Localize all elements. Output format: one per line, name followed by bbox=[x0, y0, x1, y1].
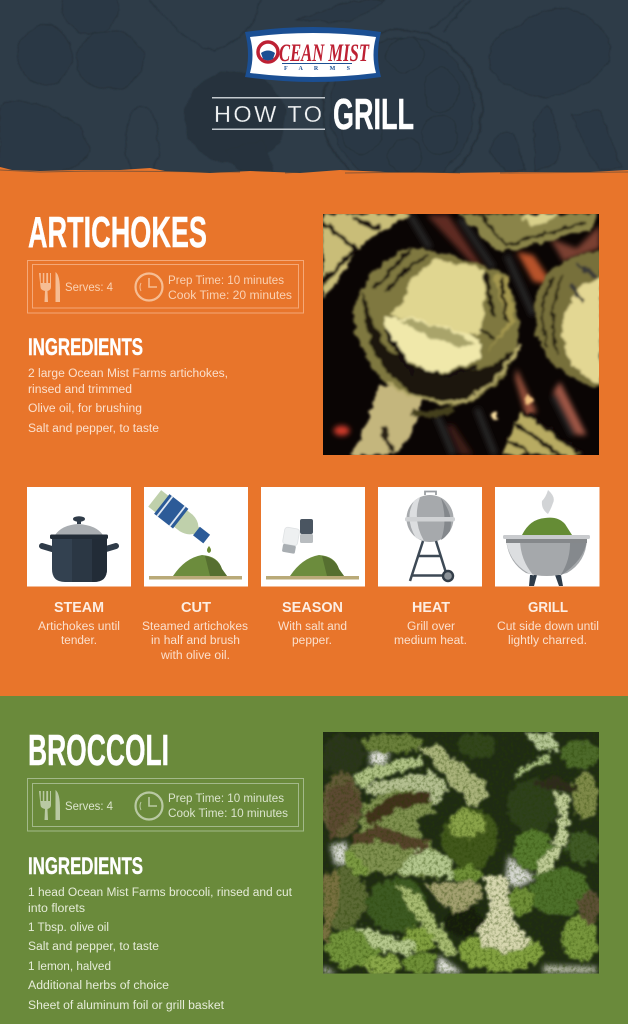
panel: broccoli bbox=[0, 696, 628, 1024]
stats box: broccoli serves and time: Serves: 4 bbox=[65, 801, 114, 813]
sketch background: vegetables bbox=[0, 0, 622, 190]
step captions: artichokes: pepper. bbox=[292, 635, 332, 647]
step captions: artichokes: Grill over bbox=[407, 621, 455, 633]
ingredient list: artichokes: Salt and pepper, to taste bbox=[28, 423, 159, 435]
stats box: broccoli serves and time: Prep Time: 10 minutes bbox=[168, 793, 284, 805]
stats box: artichokes serves and time bbox=[28, 260, 304, 313]
icon: salt and pepper shakers bbox=[266, 519, 359, 580]
step captions: artichokes: SEASON bbox=[282, 600, 343, 616]
icon: steaming pot bbox=[42, 516, 116, 582]
heading: ingredients: INGREDIENTS bbox=[28, 853, 143, 880]
icon: clock bbox=[136, 274, 162, 300]
header: dark banner bbox=[0, 0, 628, 190]
step tile: grill bbox=[495, 487, 600, 586]
ingredient list: artichokes: Olive oil, for brushing bbox=[28, 403, 142, 415]
stems bbox=[353, 757, 427, 788]
stem bbox=[352, 385, 423, 455]
step captions: artichokes: Cut side down until bbox=[497, 621, 599, 633]
ingredient list: broccoli: 1 Tbsp. olive oil bbox=[28, 922, 109, 934]
ingredient list: broccoli: into florets bbox=[28, 903, 85, 915]
step captions: artichokes: medium heat. bbox=[394, 635, 467, 647]
icon: fork and knife bbox=[39, 272, 60, 302]
heading: ingredients: INGREDIENTS bbox=[28, 334, 143, 361]
bottom right leaves bbox=[503, 412, 583, 455]
paper showing through bbox=[370, 750, 390, 767]
ingredient list: artichokes: rinsed and trimmed bbox=[28, 384, 132, 396]
title: How to Grill: HOW TO bbox=[214, 101, 322, 127]
ingredient list: artichokes bbox=[28, 368, 228, 435]
icon: fork and knife bbox=[39, 790, 60, 820]
step captions: artichokes bbox=[38, 600, 599, 662]
step captions: artichokes: Artichokes until bbox=[38, 621, 120, 633]
icon: kettle grill bbox=[405, 492, 455, 581]
step captions: artichokes: STEAM bbox=[54, 600, 104, 616]
title: How to Grill: GRILL bbox=[333, 90, 414, 139]
heading: Broccoli: BROCCOLI bbox=[28, 726, 169, 775]
stats box: artichokes serves and time: Cook Time: 20 minutes bbox=[168, 290, 292, 302]
top pieces bbox=[323, 214, 410, 298]
ingredient list: broccoli: Sheet of aluminum foil or grill basket bbox=[28, 1000, 225, 1012]
logo: Ocean Mist Farms: CEAN MIST bbox=[279, 40, 370, 67]
step captions: artichokes: lightly charred. bbox=[508, 635, 587, 647]
icon: clock bbox=[136, 792, 162, 820]
step captions: artichokes: in half and brush bbox=[151, 635, 240, 647]
ingredient list: broccoli: Additional herbs of choice bbox=[28, 980, 169, 992]
icon: grill with broccoli bbox=[503, 490, 590, 586]
photo: grilled artichokes bbox=[323, 214, 602, 455]
logo: Ocean Mist Farms bbox=[245, 27, 381, 82]
logo: Ocean Mist Farms: F A R M S bbox=[284, 66, 351, 72]
step tile: season bbox=[261, 487, 365, 586]
step captions: artichokes: GRILL bbox=[528, 600, 568, 616]
title: How to Grill bbox=[212, 90, 414, 139]
stats box: artichokes serves and time: Serves: 4 bbox=[65, 282, 114, 294]
heading: Artichokes: ARTICHOKES bbox=[28, 208, 207, 257]
step tile: heat bbox=[378, 487, 482, 586]
florets bbox=[322, 735, 365, 775]
stats box: broccoli serves and time bbox=[28, 778, 304, 831]
ingredient list: broccoli: 1 lemon, halved bbox=[28, 961, 111, 973]
step tile: steam bbox=[27, 487, 131, 586]
panel: artichokes bbox=[0, 167, 628, 696]
step captions: artichokes: HEAT bbox=[412, 600, 450, 616]
step captions: artichokes: Steamed artichokes bbox=[142, 621, 248, 633]
step captions: artichokes: with olive oil. bbox=[160, 650, 230, 662]
photo: grilled broccoli bbox=[320, 732, 602, 975]
main artichoke bbox=[353, 247, 518, 407]
stats box: broccoli serves and time: Cook Time: 10 minutes bbox=[168, 808, 288, 820]
step tile: cut bbox=[144, 487, 248, 586]
step captions: artichokes: tender. bbox=[61, 635, 97, 647]
right artichoke bbox=[535, 252, 602, 388]
ingredient list: broccoli: 1 head Ocean Mist Farms broccoli, rinsed and cut bbox=[28, 887, 293, 899]
step captions: artichokes: With salt and bbox=[278, 621, 347, 633]
ingredient list: broccoli bbox=[28, 887, 293, 1012]
ingredient list: broccoli: Salt and pepper, to taste bbox=[28, 941, 159, 953]
stats box: artichokes serves and time: Prep Time: 10 minutes bbox=[168, 275, 284, 287]
icon: olive oil bottle bbox=[147, 489, 242, 580]
step captions: artichokes: CUT bbox=[181, 600, 211, 616]
ingredient list: artichokes: 2 large Ocean Mist Farms artichokes, bbox=[28, 368, 228, 380]
